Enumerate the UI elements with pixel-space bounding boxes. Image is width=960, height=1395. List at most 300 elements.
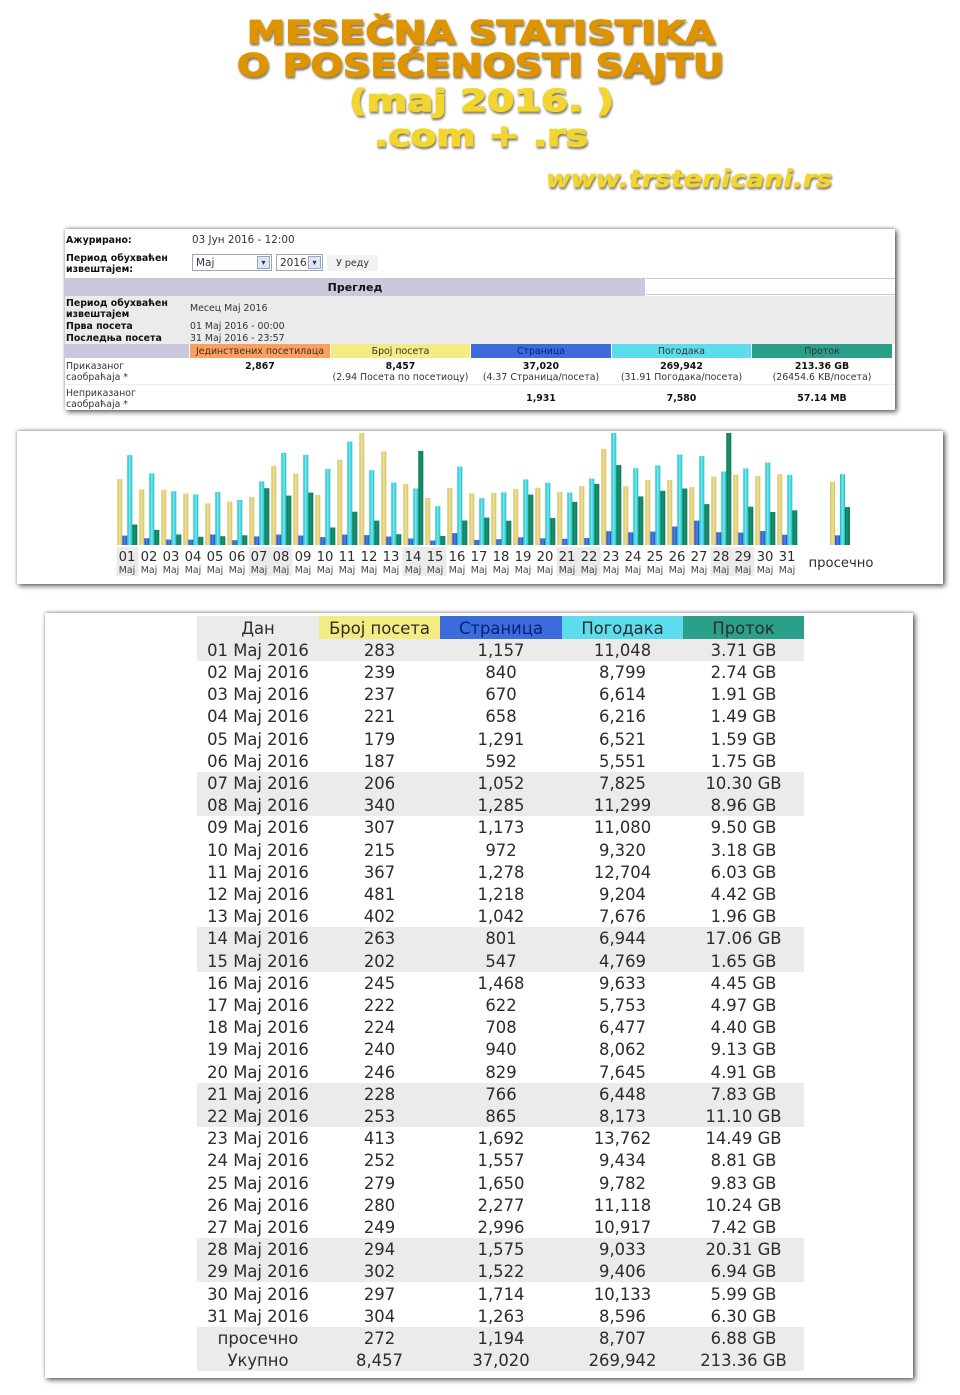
table: daily statistics: 240 — [364, 1040, 395, 1059]
table: daily statistics: 1,173 — [478, 818, 524, 837]
value: visits — [333, 361, 468, 383]
table: daily statistics: 10.24 GB — [705, 1196, 782, 1215]
table: daily statistics: 29 Мај 2016 — [207, 1262, 309, 1281]
table: daily statistics: 24 Мај 2016 — [207, 1151, 309, 1170]
table: daily statistics: 10,133 — [594, 1285, 651, 1304]
table: daily statistics: 1,052 — [478, 774, 524, 793]
month labels: Мај — [581, 565, 597, 576]
table: daily statistics: 4.40 GB — [711, 1018, 776, 1037]
day numbers: 26 — [669, 550, 685, 565]
table: daily statistics: 6.94 GB — [711, 1262, 776, 1281]
table: daily statistics: 622 — [485, 996, 517, 1015]
table: daily statistics: 9,204 — [599, 885, 646, 904]
bars: average — [830, 474, 850, 545]
table: daily statistics: 20.31 GB — [705, 1240, 782, 1259]
value: period: Месец Мај 2016 — [190, 303, 267, 314]
table: daily statistics: 8.81 GB — [711, 1151, 776, 1170]
month labels: Мај — [537, 565, 553, 576]
day numbers: 07 — [251, 550, 267, 565]
table: daily statistics: 06 Мај 2016 — [207, 752, 309, 771]
table: daily statistics: 2,277 — [478, 1196, 524, 1215]
table: daily statistics: 865 — [485, 1107, 517, 1126]
table: daily statistics: просечно — [218, 1329, 298, 1348]
table: daily statistics: 3.71 GB — [711, 641, 776, 660]
table: daily statistics: 202 — [364, 952, 395, 971]
table: daily statistics: 239 — [364, 663, 395, 682]
table: daily statistics: 829 — [485, 1063, 517, 1082]
table: daily statistics: 221 — [364, 707, 395, 726]
day numbers: 19 — [515, 550, 531, 565]
day numbers: 04 — [185, 550, 201, 565]
table: daily statistics: 14.49 GB — [705, 1129, 782, 1148]
value: visits: (2.94 Посета по посетиоцу) — [333, 372, 468, 383]
table: daily statistics: 9,633 — [599, 974, 646, 993]
table: daily statistics: 1.75 GB — [711, 752, 776, 771]
table: daily statistics: 367 — [364, 863, 395, 882]
day numbers: 09 — [295, 550, 311, 565]
table: daily statistics: Дан — [241, 619, 275, 638]
table: daily statistics: Погодака — [581, 619, 664, 638]
table: daily statistics: 249 — [364, 1218, 395, 1237]
table: daily statistics: 7.83 GB — [711, 1085, 776, 1104]
value: hits — [621, 361, 742, 383]
table: daily statistics: 1,650 — [478, 1174, 524, 1193]
table: daily statistics: 972 — [485, 841, 517, 860]
table: daily statistics: 279 — [364, 1174, 395, 1193]
table: daily statistics: 2.74 GB — [711, 663, 776, 682]
day numbers: 06 — [229, 550, 245, 565]
day numbers: 11 — [339, 550, 355, 565]
header: bandwidth: Проток — [804, 346, 840, 357]
month labels: Мај — [493, 565, 509, 576]
day numbers: 16 — [449, 550, 465, 565]
table: daily statistics: Број посета — [329, 619, 430, 638]
header: hits: Погодака — [658, 346, 705, 357]
day numbers: 27 — [691, 550, 707, 565]
title: www.trstenicani.rs — [546, 165, 832, 193]
table: daily statistics: 224 — [364, 1018, 395, 1037]
table: daily statistics: 07 Мај 2016 — [207, 774, 309, 793]
select: year: 2016 — [280, 257, 307, 269]
table: daily statistics: 8,799 — [599, 663, 646, 682]
table: daily statistics: 12,704 — [594, 863, 651, 882]
table: daily statistics: 269,942 — [589, 1351, 656, 1370]
button: ok — [327, 255, 378, 271]
title: MESEČNA STATISTIKA — [247, 14, 715, 51]
day numbers: 20 — [537, 550, 553, 565]
table: daily statistics: 6,944 — [599, 929, 646, 948]
table: daily statistics: 237 — [364, 685, 395, 704]
table: daily statistics: 10,917 — [594, 1218, 651, 1237]
table: daily statistics: 9.50 GB — [711, 818, 776, 837]
button: ok: У реду — [336, 258, 369, 269]
day numbers: 21 — [559, 550, 575, 565]
value: pages: (4.37 Страница/посета) — [483, 372, 599, 383]
table: daily statistics: 4.42 GB — [711, 885, 776, 904]
month labels: Мај — [383, 565, 399, 576]
table: daily statistics: 1,218 — [478, 885, 524, 904]
table: daily statistics: 8,707 — [599, 1329, 646, 1348]
month labels: Мај — [449, 565, 465, 576]
label: period: Период обухваћен — [66, 298, 168, 309]
month labels: Мај — [691, 565, 707, 576]
table: daily statistics: 37,020 — [472, 1351, 530, 1370]
month labels: Мај — [185, 565, 201, 576]
table: daily statistics: 340 — [364, 796, 395, 815]
table: daily statistics: 10 Мај 2016 — [207, 841, 309, 860]
table: daily statistics: 9.13 GB — [711, 1040, 776, 1059]
header: bandwidth — [752, 344, 892, 358]
table: daily statistics: 1,557 — [478, 1151, 524, 1170]
table: daily statistics: 8,457 — [356, 1351, 403, 1370]
table: daily statistics: 16 Мај 2016 — [207, 974, 309, 993]
header: unique visitors: Јединствених посетилаца — [196, 346, 324, 357]
table: daily statistics: 17.06 GB — [705, 929, 782, 948]
table: daily statistics: 840 — [485, 663, 517, 682]
table: daily statistics: 940 — [485, 1040, 517, 1059]
day numbers — [119, 550, 795, 565]
value: visits: 8,457 — [386, 361, 415, 372]
table: daily statistics: 670 — [485, 685, 517, 704]
table: daily statistics: 297 — [364, 1285, 395, 1304]
label: hidden: Неприказаног — [66, 388, 136, 399]
table: daily statistics: 13 Мај 2016 — [207, 907, 309, 926]
bars: daily series — [117, 433, 797, 545]
table: daily statistics: 252 — [364, 1151, 395, 1170]
table: daily statistics: 206 — [364, 774, 395, 793]
header: visits: Број посета — [372, 346, 429, 357]
table: daily statistics: 15 Мај 2016 — [207, 952, 309, 971]
table: daily statistics: 1.65 GB — [711, 952, 776, 971]
day numbers: 10 — [317, 550, 333, 565]
table: daily statistics: 307 — [364, 818, 395, 837]
day numbers: 02 — [141, 550, 157, 565]
select: month: Мај — [196, 257, 214, 269]
value: visitors: 2,867 — [245, 361, 275, 372]
day numbers: 28 — [713, 550, 729, 565]
table: daily statistics: 215 — [364, 841, 395, 860]
table: daily statistics: 246 — [364, 1063, 395, 1082]
day numbers: 22 — [581, 550, 597, 565]
month labels: Мај — [339, 565, 355, 576]
table: daily statistics: 1,575 — [478, 1240, 524, 1259]
table: daily statistics: 7,676 — [599, 907, 646, 926]
label: hidden: саобраћаја * — [66, 399, 128, 410]
table: daily statistics: 18 Мај 2016 — [207, 1018, 309, 1037]
table: daily statistics: 7,825 — [599, 774, 646, 793]
table: daily statistics: 6,477 — [599, 1018, 646, 1037]
table: daily statistics: 3.18 GB — [711, 841, 776, 860]
day numbers: 31 — [779, 550, 795, 565]
table: daily statistics: 1,291 — [478, 730, 524, 749]
value: first visit: 01 Мај 2016 - 00:00 — [190, 321, 285, 332]
table: daily statistics: 10.30 GB — [705, 774, 782, 793]
table: daily statistics: 801 — [485, 929, 517, 948]
table: daily statistics: 9,033 — [599, 1240, 646, 1259]
label: first visit: Прва посета — [66, 321, 133, 332]
label: displayed: саобраћаја * — [66, 372, 128, 383]
table: daily statistics: 23 Мај 2016 — [207, 1129, 309, 1148]
table: daily statistics: 708 — [485, 1018, 517, 1037]
table: daily statistics: 253 — [364, 1107, 395, 1126]
table: daily statistics: 280 — [364, 1196, 395, 1215]
table: daily statistics: 9,320 — [599, 841, 646, 860]
table: daily statistics: 1.96 GB — [711, 907, 776, 926]
row: hidden traffic — [66, 388, 847, 410]
month labels: Мај — [669, 565, 685, 576]
label: updated: Ажурирано: — [66, 235, 132, 246]
table: daily statistics: 9.83 GB — [711, 1174, 776, 1193]
table: daily statistics: 11 Мај 2016 — [207, 863, 309, 882]
table: daily statistics: 304 — [364, 1307, 395, 1326]
table: daily statistics: 766 — [485, 1085, 517, 1104]
table: daily statistics: 31 Мај 2016 — [207, 1307, 309, 1326]
month labels: Мај — [559, 565, 575, 576]
month labels: Мај — [229, 565, 245, 576]
table: daily statistics: 30 Мај 2016 — [207, 1285, 309, 1304]
day numbers: 29 — [735, 550, 751, 565]
month labels: Мај — [713, 565, 729, 576]
table: daily statistics: 03 Мај 2016 — [207, 685, 309, 704]
table: daily statistics: 294 — [364, 1240, 395, 1259]
table: daily statistics: 8.96 GB — [711, 796, 776, 815]
select: month — [192, 254, 272, 271]
row: displayed traffic — [65, 358, 895, 385]
title: (maj 2016. ) — [349, 84, 614, 119]
month labels: Мај — [603, 565, 619, 576]
table: daily statistics: 11,299 — [594, 796, 651, 815]
table: daily statistics: 302 — [364, 1262, 395, 1281]
table: daily statistics: 7.42 GB — [711, 1218, 776, 1237]
value: hits: 269,942 — [660, 361, 703, 372]
table: daily statistics: 1,285 — [478, 796, 524, 815]
title: O POSEĆENOSTI SAJTU — [237, 47, 724, 84]
table: daily statistics: 6.88 GB — [711, 1329, 776, 1348]
table: daily statistics: 28 Мај 2016 — [207, 1240, 309, 1259]
band: right outline — [646, 278, 895, 295]
day numbers: 25 — [647, 550, 663, 565]
table: daily statistics: 08 Мај 2016 — [207, 796, 309, 815]
table: daily statistics: 9,434 — [599, 1151, 646, 1170]
table: daily statistics: 1,468 — [478, 974, 524, 993]
value: hidden pages: 1,931 — [526, 393, 556, 404]
month labels: Мај — [163, 565, 179, 576]
table: daily statistics: 213.36 GB — [700, 1351, 787, 1370]
month labels: Мај — [317, 565, 333, 576]
value: last visit: 31 Мај 2016 - 23:57 — [190, 333, 285, 344]
header: visits — [331, 344, 470, 358]
label: report period — [66, 253, 168, 275]
table: daily statistics: 4.91 GB — [711, 1063, 776, 1082]
table: daily statistics: 6.03 GB — [711, 863, 776, 882]
label: period — [66, 298, 168, 320]
table: daily statistics: 6,216 — [599, 707, 646, 726]
table: daily statistics: 547 — [485, 952, 517, 971]
day numbers: 30 — [757, 550, 773, 565]
table: daily statistics: 2,996 — [478, 1218, 524, 1237]
value: bandwidth — [773, 361, 871, 383]
table: daily statistics: 263 — [364, 929, 395, 948]
table: daily statistics: 01 Мај 2016 — [207, 641, 309, 660]
panel: bar chart — [17, 431, 943, 584]
table: daily statistics: 222 — [364, 996, 395, 1015]
table: daily statistics: 19 Мај 2016 — [207, 1040, 309, 1059]
table: daily statistics: 1,522 — [478, 1262, 524, 1281]
select: year: ▾ — [312, 258, 316, 267]
day numbers: 08 — [273, 550, 289, 565]
day numbers: 03 — [163, 550, 179, 565]
label: hidden — [66, 388, 136, 410]
month labels: Мај — [471, 565, 487, 576]
day numbers: 12 — [361, 550, 377, 565]
day numbers: 24 — [625, 550, 641, 565]
table: daily statistics: 1.49 GB — [711, 707, 776, 726]
table: daily statistics: 02 Мај 2016 — [207, 663, 309, 682]
table: daily statistics: Страница — [459, 619, 543, 638]
band: overview heading — [65, 278, 645, 296]
table: daily statistics: 05 Мај 2016 — [207, 730, 309, 749]
month labels: Мај — [207, 565, 223, 576]
table: daily statistics: 272 — [364, 1329, 395, 1348]
value: pages: 37,020 — [523, 361, 559, 372]
value: hits: (31.91 Погодака/посета) — [621, 372, 742, 383]
average label: просечно — [809, 556, 873, 571]
month labels: Мај — [427, 565, 443, 576]
table: daily statistics: 25 Мај 2016 — [207, 1174, 309, 1193]
month labels — [119, 565, 795, 576]
table: daily statistics: 7,645 — [599, 1063, 646, 1082]
table: daily statistics: 4,769 — [599, 952, 646, 971]
value: hidden hits: 7,580 — [667, 393, 696, 404]
value: hidden bandwidth: 57.14 MB — [797, 393, 847, 404]
table: daily statistics: 1.59 GB — [711, 730, 776, 749]
table: daily statistics: 4.45 GB — [711, 974, 776, 993]
table: daily statistics: 1.91 GB — [711, 685, 776, 704]
table: daily statistics: 402 — [364, 907, 395, 926]
table: daily statistics: 6,448 — [599, 1085, 646, 1104]
band: overview heading: Преглед — [328, 281, 382, 294]
select: year — [276, 254, 323, 271]
table: daily statistics: 11.10 GB — [705, 1107, 782, 1126]
table: daily statistics: 5,753 — [599, 996, 646, 1015]
month labels: Мај — [295, 565, 311, 576]
month labels: Мај — [361, 565, 377, 576]
panel: daily table — [45, 613, 913, 1378]
label: last visit: Последња посета — [66, 333, 162, 344]
table: daily statistics: 481 — [364, 885, 395, 904]
table: daily statistics — [197, 616, 804, 1371]
table: daily statistics: Проток — [712, 619, 775, 638]
table: daily statistics: 21 Мај 2016 — [207, 1085, 309, 1104]
table: daily statistics: 17 Мај 2016 — [207, 996, 309, 1015]
table: daily statistics: 12 Мај 2016 — [207, 885, 309, 904]
table: daily statistics: 11,118 — [594, 1196, 651, 1215]
label: report period: Период обухваћен — [66, 253, 168, 264]
table: daily statistics: 1,263 — [478, 1307, 524, 1326]
label: displayed — [66, 361, 128, 383]
table: daily statistics: 8,596 — [599, 1307, 646, 1326]
day numbers: 17 — [471, 550, 487, 565]
day numbers: 15 — [427, 550, 443, 565]
month labels: Мај — [757, 565, 773, 576]
month labels: Мај — [141, 565, 157, 576]
table: daily statistics: 1,157 — [478, 641, 524, 660]
month labels: Мај — [779, 565, 795, 576]
day numbers: 05 — [207, 550, 223, 565]
table: daily statistics: 04 Мај 2016 — [207, 707, 309, 726]
table: daily statistics: 228 — [364, 1085, 395, 1104]
panel: summary — [65, 229, 895, 410]
month labels: Мај — [647, 565, 663, 576]
table: daily statistics: 4.97 GB — [711, 996, 776, 1015]
month labels: Мај — [735, 565, 751, 576]
title — [237, 13, 834, 193]
table: daily statistics: 11,080 — [594, 818, 651, 837]
table: daily statistics: 6,614 — [599, 685, 646, 704]
table: daily statistics: 1,042 — [478, 907, 524, 926]
table: daily statistics: 20 Мај 2016 — [207, 1063, 309, 1082]
month labels: Мај — [251, 565, 267, 576]
header: pages — [471, 344, 611, 358]
day numbers: 23 — [603, 550, 619, 565]
table: daily statistics: 1,692 — [478, 1129, 524, 1148]
table: daily statistics: 11,048 — [594, 641, 651, 660]
month labels: Мај — [515, 565, 531, 576]
month labels: Мај — [625, 565, 641, 576]
day numbers: 18 — [493, 550, 509, 565]
table: daily statistics: 5.99 GB — [711, 1285, 776, 1304]
header: blank — [65, 344, 189, 358]
label: report period: извештајем: — [66, 264, 133, 275]
table: daily statistics: 22 Мај 2016 — [207, 1107, 309, 1126]
table: daily statistics: 13,762 — [594, 1129, 651, 1148]
day numbers: 01 — [119, 550, 135, 565]
table: daily statistics: 245 — [364, 974, 395, 993]
table: daily statistics: 1,278 — [478, 863, 524, 882]
table: daily statistics: 5,551 — [599, 752, 646, 771]
table: daily statistics: 413 — [364, 1129, 395, 1148]
weekend highlights — [116, 547, 754, 576]
table: daily statistics: 8,062 — [599, 1040, 646, 1059]
table: daily statistics: 187 — [364, 752, 395, 771]
table: daily statistics: 283 — [364, 641, 395, 660]
label: period: извештајем — [66, 309, 129, 320]
table: daily statistics: Укупно — [227, 1351, 289, 1370]
day numbers: 13 — [383, 550, 399, 565]
value: pages — [483, 361, 599, 383]
table: daily statistics: 27 Мај 2016 — [207, 1218, 309, 1237]
table: daily statistics: 9,406 — [599, 1262, 646, 1281]
table: daily statistics: 1,714 — [478, 1285, 524, 1304]
table: daily statistics: 8,173 — [599, 1107, 646, 1126]
table: daily statistics: 1,194 — [478, 1329, 524, 1348]
title: .com + .rs — [374, 119, 588, 154]
header: hits — [612, 344, 751, 358]
table: daily statistics: 179 — [364, 730, 395, 749]
table: daily statistics: 9,782 — [599, 1174, 646, 1193]
table: daily statistics: 26 Мај 2016 — [207, 1196, 309, 1215]
month labels: Мај — [119, 565, 135, 576]
month labels: Мај — [405, 565, 421, 576]
table: daily statistics: 14 Мај 2016 — [207, 929, 309, 948]
table: daily statistics: 6,521 — [599, 730, 646, 749]
header: pages: Страница — [517, 346, 565, 357]
day numbers: 14 — [405, 550, 421, 565]
select: month: ▾ — [261, 258, 266, 267]
value: bandwidth: 213.36 GB — [795, 361, 849, 372]
value: bandwidth: (26454.6 KB/посета) — [773, 372, 871, 383]
table: daily statistics: 592 — [485, 752, 517, 771]
